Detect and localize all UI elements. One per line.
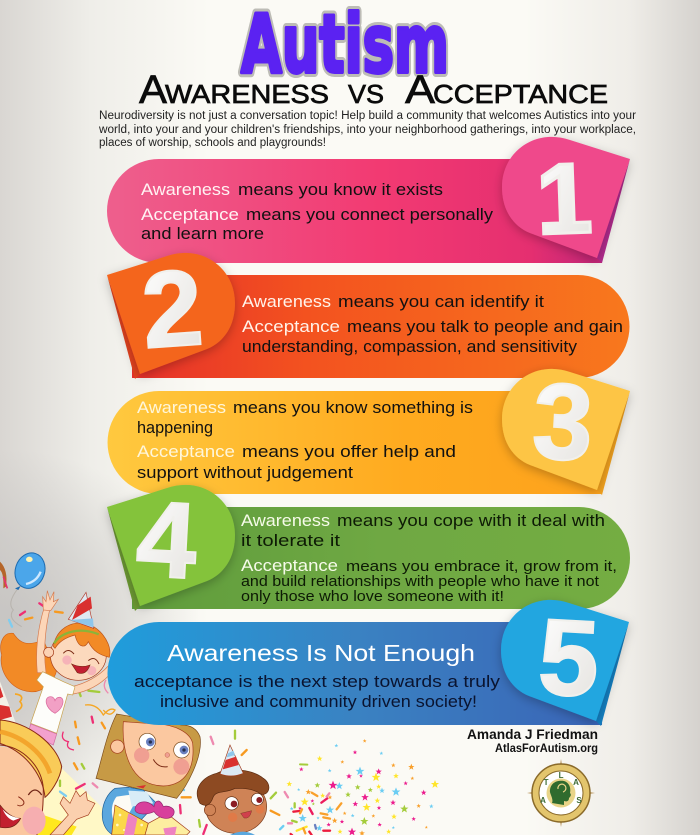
intro text block: world, into your and your children's friendships, into your neighborhood gatherings, into your workplace, xyxy=(98,124,636,136)
banner 5 text xyxy=(134,672,501,711)
panel: banner 4 xyxy=(107,478,630,611)
subtitle: Awareness vs Acceptance: CCEPTANCE xyxy=(433,79,608,109)
panel: banner 1 xyxy=(107,137,630,263)
illustration: star confetti xyxy=(280,739,439,835)
banner 1 text: Awareness xyxy=(141,180,230,199)
banner 4 text: Awareness xyxy=(241,511,330,530)
panel: banner 2 xyxy=(107,246,630,379)
banner 2 text: Acceptance xyxy=(242,317,340,336)
number 1: 1 xyxy=(534,142,594,256)
banner 3 text xyxy=(137,398,473,482)
logo: Atlas compass xyxy=(527,759,595,827)
author credit: Amanda J Friedman xyxy=(467,726,598,742)
banner 1 text xyxy=(141,180,494,243)
banner 5 heading: Awareness Is Not Enough xyxy=(167,640,475,666)
logo: Atlas compass: S xyxy=(576,796,582,805)
banner 1 text: means you connect personally xyxy=(246,205,494,224)
panel: banner 3 xyxy=(108,360,630,495)
intro text block: Neurodiversity is not just a conversation topic! Help build a community that welcomes Autistics into your xyxy=(99,110,636,122)
badge 1 xyxy=(502,137,630,263)
banner 3 text: happening xyxy=(137,418,213,437)
banner 3 text: means you offer help and xyxy=(242,442,456,461)
subtitle: Awareness vs Acceptance: WARENESS xyxy=(165,79,329,109)
banner 2 text: Awareness xyxy=(242,292,331,311)
banner 2 text: understanding, compassion, and sensitivity xyxy=(242,337,578,356)
banner 2 text: means you talk to people and gain xyxy=(347,317,623,336)
banner 3 text: support without judgement xyxy=(137,463,353,482)
subtitle: Awareness vs Acceptance: VS xyxy=(348,79,384,109)
banner 1 text: means you know it exists xyxy=(238,180,443,199)
number 3: 3 xyxy=(530,360,596,483)
banner 3 text: Awareness xyxy=(137,398,226,417)
title: Autism: Autism xyxy=(241,0,449,91)
subtitle: Awareness vs Acceptance xyxy=(139,68,608,112)
banner 2 text xyxy=(242,292,623,356)
banner 1 text: Acceptance xyxy=(141,205,239,224)
banner 1 text: and learn more xyxy=(141,224,264,243)
illustration: kids scene xyxy=(0,549,279,835)
banner 5 text: inclusive and community driven society! xyxy=(160,692,477,711)
banner 4 text xyxy=(241,511,617,605)
author credit: AtlasForAutism.org xyxy=(495,741,598,755)
banner 4 text: only those who love someone with it! xyxy=(241,588,504,605)
number 2: 2 xyxy=(138,246,206,371)
logo: Atlas compass: A xyxy=(540,796,546,805)
intro text block xyxy=(98,110,636,149)
logo: Atlas compass: T xyxy=(544,778,549,787)
author credit xyxy=(467,726,598,755)
number 4: 4 xyxy=(134,478,200,601)
subtitle: Awareness vs Acceptance: A xyxy=(405,68,435,112)
banner 2 text: means you can identify it xyxy=(338,292,544,311)
banner 4 text: and build relationships with people who have it not xyxy=(241,573,600,590)
badge 5 xyxy=(501,600,629,726)
illustration: party kids and confetti xyxy=(0,549,439,835)
badge 3 xyxy=(502,369,630,495)
banner 4 text: it tolerate it xyxy=(241,531,340,550)
banner 4 text: means you cope with it deal with xyxy=(337,511,605,530)
banner 3 text: Acceptance xyxy=(137,442,235,461)
banner 3 text: means you know something is xyxy=(233,398,473,417)
badge 4 xyxy=(107,485,235,611)
badge 2 xyxy=(107,253,235,379)
intro text block: places of worship, schools and playgrounds! xyxy=(99,137,326,149)
banner 5 text: acceptance is the next step towards a truly xyxy=(134,672,501,691)
subtitle: Awareness vs Acceptance: A xyxy=(139,68,167,112)
panel: banner 5 xyxy=(108,596,629,726)
banner 4 text: means you embrace it, grow from it, xyxy=(346,558,617,575)
number 5: 5 xyxy=(536,596,602,719)
logo: Atlas compass: A xyxy=(573,778,579,787)
title: Autism: Autism xyxy=(241,0,449,91)
banner 4 text: Acceptance xyxy=(241,556,338,575)
logo: Atlas compass: L xyxy=(559,771,564,780)
title: Autism xyxy=(241,0,449,91)
